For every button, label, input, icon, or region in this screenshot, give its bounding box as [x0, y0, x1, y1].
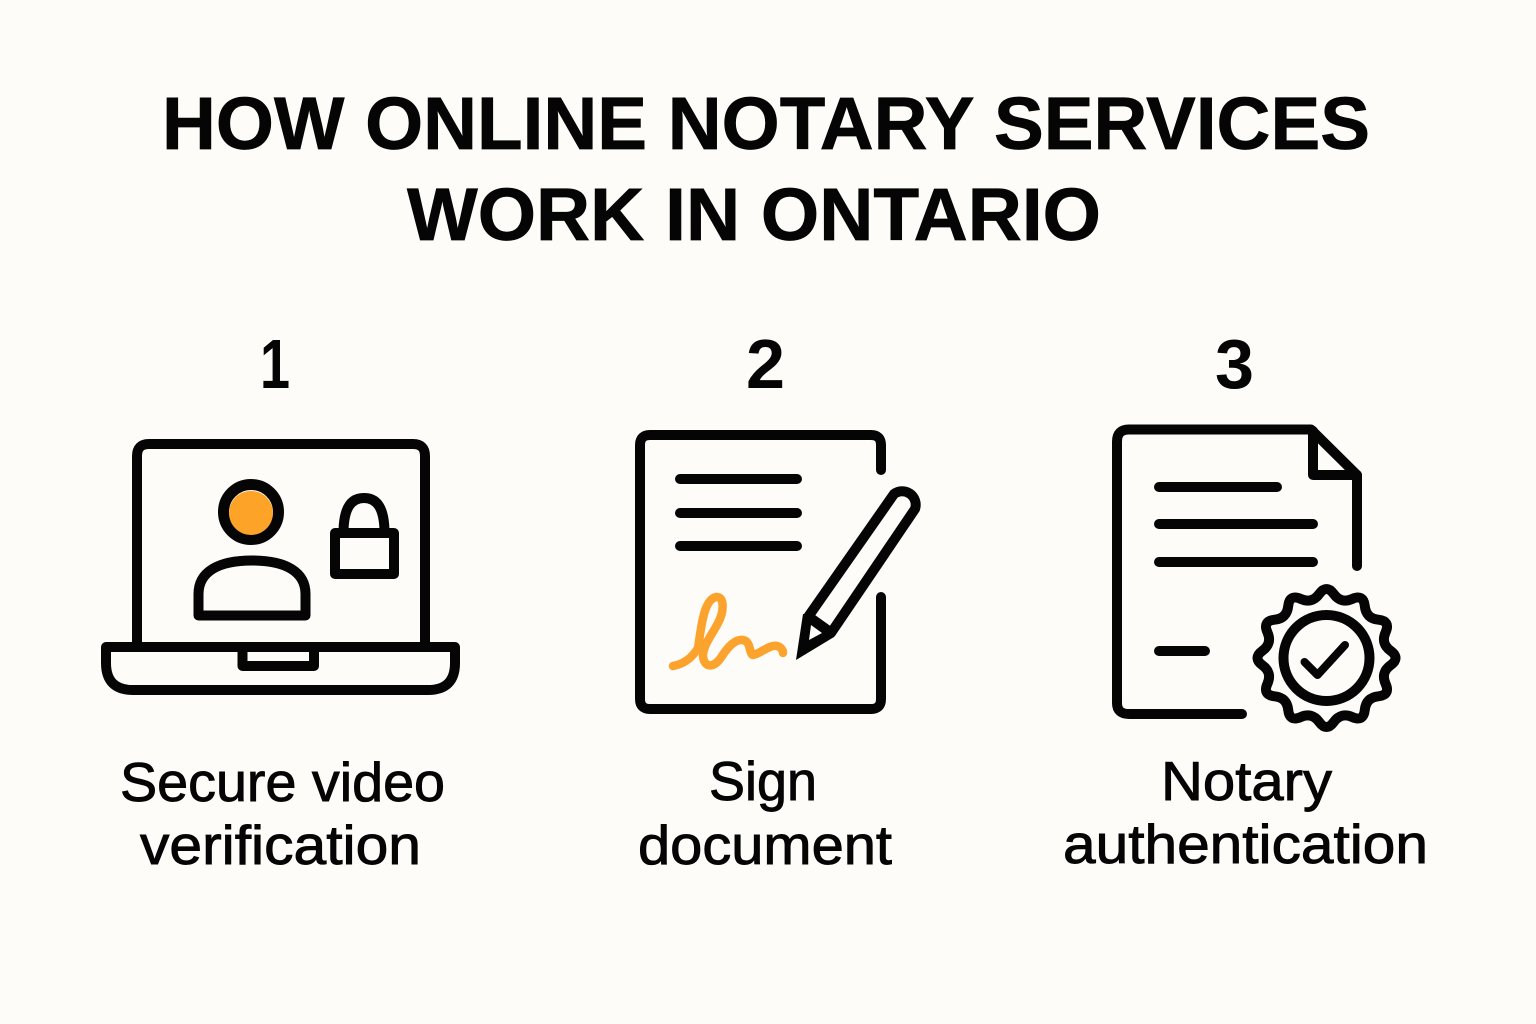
pen tip — [796, 614, 836, 660]
caption: sign document — [638, 750, 892, 876]
step number 2: 2 — [746, 325, 785, 403]
person shoulders — [198, 560, 306, 616]
caption: notary authentication — [1063, 750, 1428, 875]
panel: step 1 secure video verification — [106, 325, 455, 876]
caption: secure video verification: verification — [140, 814, 421, 876]
pen tip highlight — [809, 625, 822, 640]
pen — [796, 491, 916, 660]
document outline — [1117, 430, 1357, 714]
caption: notary authentication: authentication — [1063, 813, 1428, 875]
document outline — [640, 435, 881, 709]
laptop screen — [137, 444, 425, 647]
caption: sign document: Sign — [709, 750, 817, 812]
padlock body — [335, 533, 394, 574]
panel: step 2 sign document — [638, 325, 916, 876]
padlock shackle — [344, 498, 384, 533]
document text lines — [680, 479, 797, 546]
laptop base — [106, 647, 455, 690]
orange signature — [673, 597, 783, 666]
step number 1: 1 — [260, 325, 290, 403]
caption: notary authentication: Notary — [1161, 750, 1333, 812]
pen barrel — [808, 491, 916, 633]
check mark — [1304, 645, 1345, 675]
document text lines — [1159, 487, 1313, 651]
icon: document with certified seal — [1117, 430, 1396, 727]
icon: laptop with person and lock — [106, 444, 455, 690]
panel: step 3 notary authentication — [1063, 325, 1428, 875]
scalloped seal edge — [1257, 589, 1396, 727]
folded corner — [1313, 431, 1357, 475]
seal inner circle — [1284, 615, 1370, 701]
step number 3: 3 — [1215, 325, 1254, 403]
caption: secure video verification: Secure video — [120, 751, 445, 813]
orange head fill — [229, 491, 273, 535]
title: HOW ONLINE NOTARY SERVICES — [162, 82, 1370, 165]
title — [162, 82, 1370, 256]
caption: secure video verification — [120, 751, 445, 876]
person head — [224, 484, 278, 540]
seal badge — [1257, 589, 1396, 727]
icon: document with pen and signature — [640, 435, 916, 709]
caption: sign document: document — [638, 814, 892, 876]
title: WORK IN ONTARIO — [407, 173, 1101, 256]
laptop notch — [242, 647, 314, 666]
